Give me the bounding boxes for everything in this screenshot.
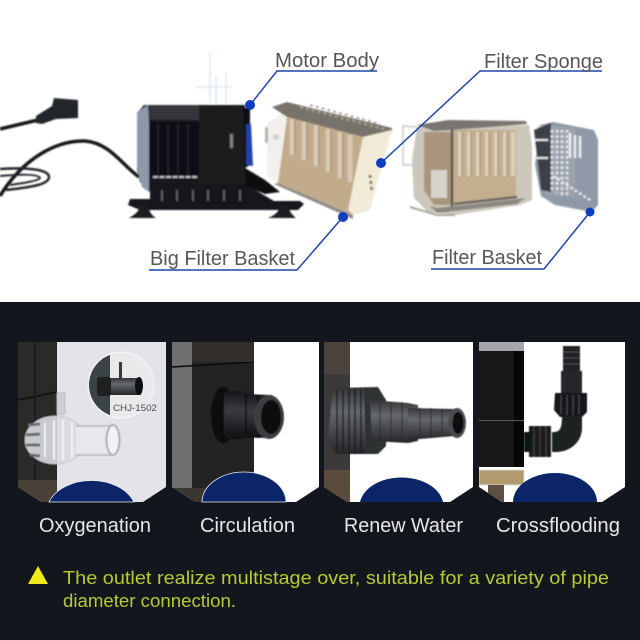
callout: filter basket: Filter Basket — [432, 247, 542, 269]
icon: clear oxygenation nozzle — [25, 393, 120, 464]
icon: elbow hose assembly — [524, 346, 587, 457]
inset: CHJ-1502 outlet detail — [88, 350, 157, 420]
panel: oxygenation — [18, 342, 166, 537]
callout: filter basket — [431, 208, 594, 269]
icon: blue semicircle — [49, 481, 134, 502]
label: oxygenation: Oxygenation — [39, 515, 151, 537]
top section: white product background — [0, 0, 640, 302]
clear outlet on top of motor — [196, 53, 232, 104]
callout: filter sponge: Filter Sponge — [484, 51, 603, 73]
icon: blue semicircle — [360, 477, 443, 502]
note text: diameter connection. — [63, 590, 236, 611]
big filter basket — [265, 102, 392, 219]
filter basket (grey perforated) — [534, 122, 598, 212]
icon: yellow warning triangle — [28, 566, 48, 584]
panel: circulation — [172, 342, 319, 537]
panel: renew water — [324, 342, 473, 537]
power cord and plug — [0, 98, 139, 196]
callout: big filter basket: Big Filter Basket — [150, 248, 295, 270]
callout: motor body: Motor Body — [275, 50, 379, 72]
icon: blue semicircle — [513, 473, 597, 502]
inset: CHJ-1502 outlet detail: CHJ-1502 — [113, 403, 157, 413]
icon: barbed hose connector — [328, 387, 466, 454]
bottom section: dark background — [0, 302, 640, 640]
callout: filter sponge — [376, 51, 603, 168]
filter sponge housing — [403, 120, 532, 215]
note text: The outlet realize multistage over, suitable for a variety of pipe — [63, 567, 609, 588]
label: renew water: Renew Water — [344, 515, 463, 537]
motor body — [128, 53, 304, 218]
motor base with suction cups — [128, 184, 304, 210]
panel: crossflooding — [479, 341, 625, 537]
callout: motor body — [245, 50, 379, 110]
callout: big filter basket — [149, 212, 348, 270]
icon: blue semicircle — [202, 472, 286, 502]
icon: barbed outlet — [211, 387, 284, 443]
label: circulation: Circulation — [200, 515, 295, 537]
label: crossflooding: Crossflooding — [496, 515, 620, 537]
